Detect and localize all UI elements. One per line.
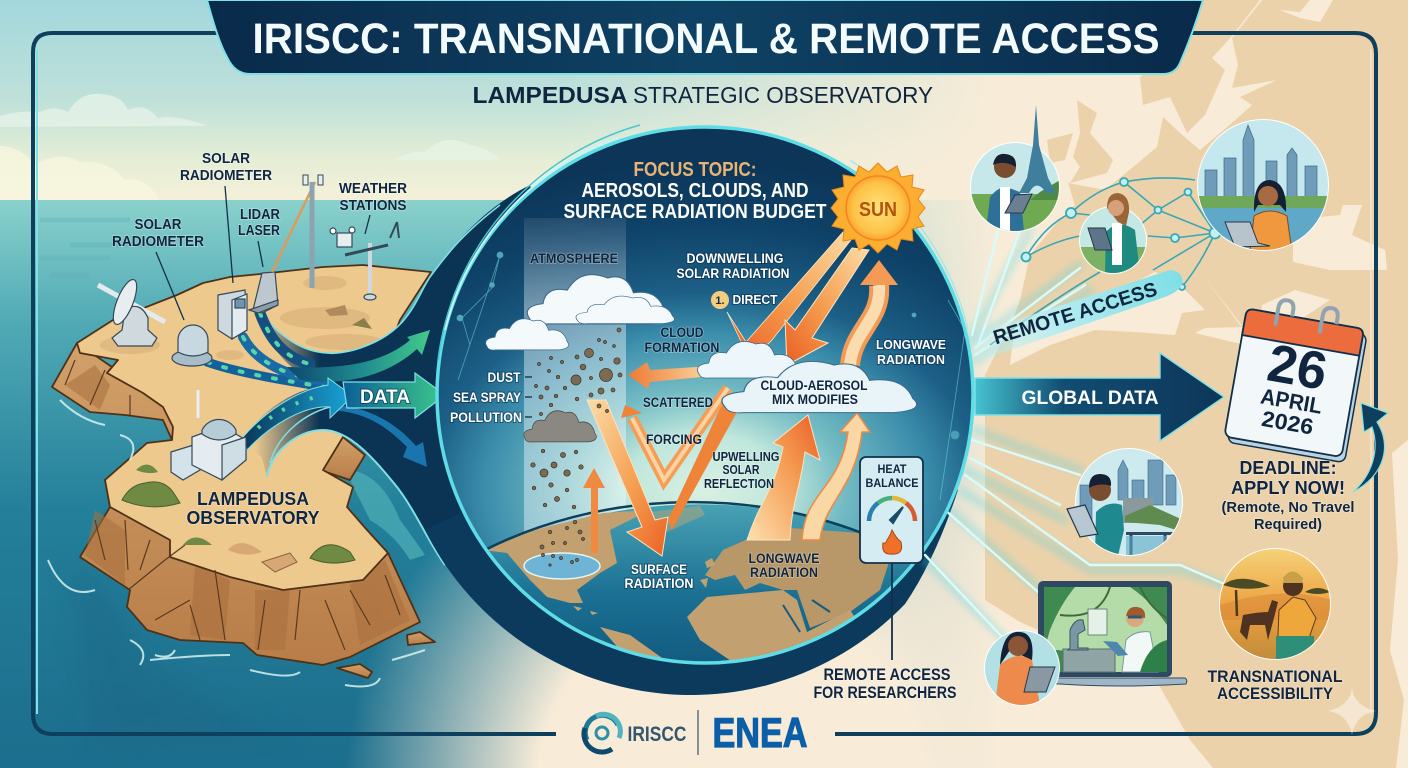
DATA label: DATA: [360, 387, 410, 408]
logo: IRISCC swirl: [584, 714, 620, 752]
logos: IRISCC: [628, 723, 686, 746]
card leader line: [891, 563, 893, 660]
label: 1. direct: 1.: [715, 295, 725, 307]
cliff shadow facets: [65, 365, 410, 650]
icon: gauge: [869, 498, 915, 523]
label: aerosol types: POLLUTION: [450, 410, 522, 425]
label: upwelling solar reflection: UPWELLING: [712, 449, 780, 464]
deadline text: Required): [1254, 516, 1322, 533]
island sand top: [77, 265, 431, 590]
label: solar radiometer lower: SOLAR: [134, 217, 182, 233]
person circle: savanna: [1219, 548, 1332, 661]
remote access pill: REMOTE ACCESS: [991, 279, 1160, 349]
curved blue arrow into DATA: [243, 378, 353, 450]
heat balance card: [860, 457, 923, 660]
label: longwave radiation bottom: RADIATION: [750, 565, 818, 580]
label: 1. direct: [711, 291, 778, 309]
label: transnational accessibility: ACCESSIBILITY: [1217, 684, 1334, 703]
deer: [1240, 600, 1278, 640]
arrow: longwave to sun: [850, 260, 898, 365]
network lines europe: [990, 178, 1220, 345]
icon: mast: [303, 175, 323, 288]
arrow: small surface up: [583, 468, 605, 553]
network nodes: [1022, 178, 1220, 290]
icon: lidar: [249, 272, 278, 313]
leader lines: [156, 186, 370, 320]
calendar: 26 April 2026: 2026: [1260, 406, 1315, 440]
cloud: left: [486, 319, 569, 350]
label: solar radiometer upper: RADIOMETER: [180, 168, 272, 184]
icon: radiometer cabinet: [218, 290, 247, 339]
orange radiation arrows: [583, 232, 898, 556]
label: longwave radiation bottom: [748, 551, 820, 580]
jungle foliage: [1044, 587, 1167, 672]
label: solar radiometer upper: SOLAR: [202, 151, 250, 167]
label: longwave radiation right: LONGWAVE: [876, 337, 946, 352]
focus topic heading: [564, 158, 827, 223]
arrow: big upwelling: [747, 415, 820, 540]
logos: [584, 709, 808, 756]
blue flow lines: [207, 313, 330, 387]
label: surface radiation: SURFACE: [631, 562, 687, 577]
label: cloud formation: FORMATION: [644, 340, 720, 355]
circle ring: [437, 127, 973, 663]
heat balance card: HEAT: [878, 462, 907, 476]
person circle: Berlin researcher: [1079, 193, 1147, 277]
subtitle: [472, 82, 933, 108]
light rays toward right side: [925, 222, 1225, 640]
map: Europe and Africa background: [985, 0, 1408, 768]
arrow: scattered head: [621, 405, 642, 418]
label: Lampedusa Observatory: LAMPEDUSA: [197, 488, 309, 509]
sea swirl patches: [70, 560, 300, 745]
label: cloud-aerosol mix modifies: MIX MODIFIES: [772, 392, 858, 407]
calendar: 26 April 2026: APRIL: [1259, 383, 1324, 419]
label: solar radiometer upper: [180, 151, 272, 184]
global data arrow: [975, 353, 1224, 441]
icon: weather station: [330, 222, 399, 300]
calendar: 26 April 2026: [1223, 294, 1371, 463]
sky clouds: [0, 94, 208, 127]
arrow: thin V stroke: [668, 400, 737, 530]
arrow: direct solar: [727, 232, 851, 356]
label: solar radiometer lower: [112, 217, 204, 250]
label: cloud formation: CLOUD: [660, 325, 704, 340]
label: surface radiation: [624, 562, 694, 591]
dark S-curve band: [243, 185, 560, 565]
remote access pill: [970, 270, 1182, 362]
label: longwave radiation bottom: LONGWAVE: [748, 551, 820, 566]
data flow shapes from island to globe: [207, 185, 560, 565]
woman body: [1277, 597, 1316, 660]
arrow: cloud to atmosphere: [628, 362, 712, 389]
label: cloud formation: [644, 325, 720, 355]
subtitle: LAMPEDUSA: [472, 82, 628, 108]
heat balance card: BALANCE: [866, 476, 918, 490]
instruments on island: [98, 175, 399, 480]
aerosol particles: [531, 328, 622, 566]
title banner: IRISCC: TRANSNATIONAL & REMOTE ACCESS: [252, 15, 1160, 63]
label: downwelling solar radiation: DOWNWELLING: [686, 251, 784, 266]
focus topic heading: SURFACE RADIATION BUDGET: [564, 200, 827, 223]
lower blue arrow: [330, 405, 427, 467]
label: aerosol types: [450, 370, 522, 425]
icon: sun: [831, 163, 925, 253]
focus topic heading: FOCUS TOPIC:: [634, 158, 756, 181]
island cliffs: [52, 343, 435, 678]
label: transnational accessibility: [1208, 667, 1342, 703]
label: transnational accessibility: TRANSNATIONAL: [1208, 667, 1342, 686]
label: lidar laser: LASER: [238, 223, 280, 239]
tree left: [1236, 590, 1237, 616]
label: downwelling solar radiation: [676, 251, 790, 281]
laser beam: [272, 182, 315, 272]
global data arrow: GLOBAL DATA: [1022, 388, 1159, 409]
clouds: [486, 275, 917, 442]
label: longwave radiation right: [876, 337, 946, 367]
island: Lampedusa terrain: [48, 265, 435, 686]
sand blotches: [100, 276, 385, 360]
laptop: remote laboratory: [1028, 581, 1187, 686]
bushes and rocks: [122, 305, 372, 572]
dark crescent around main circle: [425, 395, 958, 695]
laptop base: [1028, 678, 1187, 686]
title banner: [207, 0, 1203, 74]
cloud: upper: [527, 275, 674, 324]
label: downwelling solar radiation: SOLAR RADIATION: [676, 266, 790, 281]
arrow: big reflected down arrow: [587, 400, 668, 556]
surf lines: [48, 400, 425, 686]
deadline curved arrow: [1353, 403, 1388, 492]
subtitle: STRATEGIC OBSERVATORY: [633, 82, 933, 108]
arrow: forcing V: [632, 388, 728, 480]
deadline text: [1222, 458, 1354, 533]
calendar date: 26: [1263, 333, 1331, 402]
land masses: [488, 511, 637, 603]
person circle: woman with tablet: [984, 630, 1060, 706]
diagram labels: ATMOSPHERE: [530, 251, 618, 266]
sparkle: [1328, 688, 1376, 735]
deadline text: (Remote, No Travel: [1222, 499, 1354, 516]
label: upwelling solar reflection: REFLECTION: [704, 476, 774, 491]
logo: ENEA: ENEA: [712, 709, 808, 756]
diagram labels: FORCING: [646, 432, 702, 447]
cloud: dark pollution: [524, 411, 596, 442]
label: Lampedusa Observatory: OBSERVATORY: [186, 507, 320, 528]
label: 1. direct: DIRECT: [732, 292, 778, 307]
person circle: Paris researcher: [970, 105, 1060, 234]
icon: flame: [883, 530, 902, 554]
label: weather stations: WEATHER: [339, 181, 407, 197]
cliff cracks: [65, 360, 400, 650]
label: upwelling solar reflection: SOLAR: [722, 462, 760, 477]
label: Lampedusa Observatory: [186, 488, 320, 528]
label: aerosol types: DUST: [488, 370, 521, 385]
aerosol leader dashes: [525, 377, 532, 417]
label: remote access for researchers: [814, 665, 956, 702]
arrow: longwave upward: [802, 413, 870, 540]
island labels: [112, 151, 407, 528]
person circle: skyline researcher: [1197, 119, 1329, 258]
icon: Eiffel tower: [1019, 105, 1056, 193]
DATA arrow: [343, 373, 445, 418]
icon: radiometer dome: [172, 325, 212, 366]
icon: sun: SUN: [859, 199, 897, 221]
label: surface radiation: RADIATION: [624, 576, 694, 591]
earth rim: [485, 502, 862, 550]
label: cloud-aerosol mix modifies: CLOUD-AEROSOL: [760, 378, 868, 393]
label: lidar laser: [238, 207, 280, 239]
label: cloud-aerosol mix modifies: [760, 378, 868, 407]
diagram labels: [450, 251, 946, 591]
deadline text: APPLY NOW!: [1231, 478, 1345, 498]
person circle: city researcher with tablet: [1067, 448, 1186, 556]
label: longwave radiation right: RADIATION: [877, 352, 945, 367]
main circle: radiation budget diagram: [435, 124, 974, 665]
cloud: cloud-aerosol mix: [722, 361, 917, 413]
deadline text: DEADLINE:: [1240, 458, 1336, 478]
network decoration: [457, 252, 965, 500]
label: upwelling solar reflection: [704, 449, 780, 491]
label: aerosol types: SEA SPRAY: [453, 390, 521, 405]
label: lidar laser: LIDAR: [240, 207, 280, 223]
label: solar radiometer lower: RADIOMETER: [112, 234, 204, 250]
cloud: small over arrows: [697, 341, 799, 378]
label: remote access for researchers: FOR RESEARCHERS: [814, 683, 956, 702]
earth: [487, 500, 910, 662]
map seas: [1010, 0, 1387, 365]
green upper arrow: [287, 330, 430, 382]
diagram labels: SCATTERED: [643, 395, 713, 410]
atmosphere column: [524, 218, 626, 532]
data chevrons: [258, 396, 320, 428]
focus topic heading: AEROSOLS, CLOUDS, AND: [582, 179, 808, 202]
icon: sun tracker dish: [98, 277, 165, 346]
label: weather stations: STATIONS: [340, 198, 407, 214]
label: remote access for researchers: REMOTE ACCESS: [824, 665, 950, 684]
label: weather stations: [339, 181, 407, 214]
arrow: downwelling: [785, 248, 869, 365]
pond: [524, 553, 600, 579]
icon: observatory building: [171, 419, 246, 480]
